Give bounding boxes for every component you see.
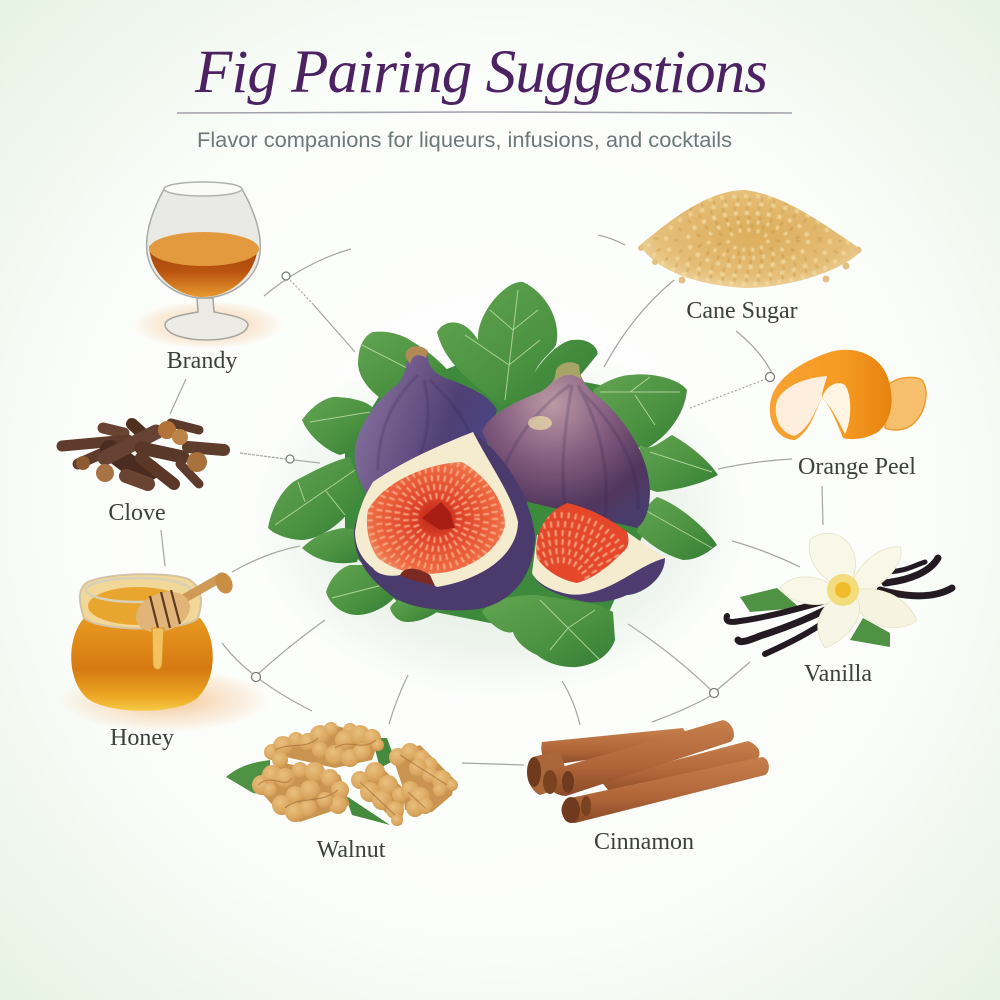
leaves	[268, 282, 718, 667]
icon: vanilla pods	[727, 558, 952, 654]
honey dipper	[185, 577, 222, 598]
label: Cane Sugar: Cane Sugar	[686, 298, 798, 324]
left fig stem	[406, 346, 428, 364]
label: Cinnamon: Cinnamon	[594, 829, 694, 855]
glass rim	[164, 182, 242, 196]
label: Walnut: Walnut	[317, 837, 386, 863]
label: Honey: Honey	[110, 725, 174, 751]
icon: orange peel curl	[885, 377, 926, 430]
icon: cinnamon sticks	[527, 720, 769, 823]
icon: brandy glass	[147, 184, 260, 298]
back left fig	[355, 352, 497, 500]
icon: honey jar	[71, 618, 213, 711]
connector lines	[161, 235, 823, 765]
icon: cane sugar pile	[640, 190, 862, 288]
flower centre	[827, 574, 859, 606]
label: Clove: Clove	[108, 500, 166, 526]
icon: vanilla flower	[780, 533, 917, 648]
label: Orange Peel: Orange Peel	[798, 454, 916, 480]
quarter fig	[532, 558, 665, 602]
sugar grains	[648, 196, 848, 284]
quarter fig cream	[532, 532, 665, 595]
halved fig seeds	[367, 462, 505, 574]
icon: cloves	[62, 421, 224, 484]
halved fig centre	[422, 502, 455, 530]
central fig group	[268, 282, 718, 674]
glass stem and foot	[165, 298, 248, 340]
fig stripes	[378, 375, 638, 520]
label: Brandy: Brandy	[167, 348, 237, 374]
pairing: cinnamon	[527, 720, 769, 855]
quarter fig seeds	[536, 512, 624, 580]
title: Fig Pairing Suggestions	[194, 39, 768, 106]
quarter fig flesh	[536, 503, 628, 583]
icon: vanilla leaves	[740, 588, 800, 612]
jar glass neck	[80, 574, 201, 628]
dipper end	[212, 570, 236, 596]
honey drip	[152, 628, 164, 670]
subtitle: Flavor companions for liqueurs, infusions, and cocktails	[197, 128, 732, 152]
label: Vanilla: Vanilla	[804, 661, 872, 687]
honey surface	[88, 587, 188, 625]
pairing: honey	[60, 570, 270, 751]
loose grains	[638, 245, 862, 284]
pairing: clove	[62, 421, 224, 526]
right fig stem	[554, 362, 582, 382]
dipper grooves	[150, 590, 180, 632]
dipper head	[130, 585, 196, 639]
pairing: walnut	[226, 722, 458, 863]
connector nodes	[252, 272, 774, 698]
leaf veins	[275, 290, 712, 660]
halved fig	[354, 432, 535, 610]
brandy surface	[149, 232, 259, 266]
pairing: orange peel	[770, 350, 926, 480]
leaf backing	[345, 360, 650, 625]
orange peel main	[770, 350, 892, 440]
halved fig cream rim	[355, 432, 518, 587]
halved fig dark base	[400, 569, 435, 586]
brandy liquid	[149, 245, 258, 297]
walnut backing	[255, 724, 455, 825]
peel inner	[776, 376, 827, 436]
icon: walnuts	[226, 760, 270, 795]
pairing: vanilla	[727, 533, 952, 687]
fig highlight	[528, 416, 552, 430]
pairing: brandy	[133, 182, 283, 374]
title underline	[177, 112, 792, 113]
peel pith	[822, 383, 850, 434]
pairing: cane sugar	[638, 190, 862, 324]
glass rim inner	[86, 578, 190, 602]
halved fig flesh	[367, 462, 505, 574]
walnut creases	[258, 738, 447, 815]
back right fig	[482, 362, 650, 528]
